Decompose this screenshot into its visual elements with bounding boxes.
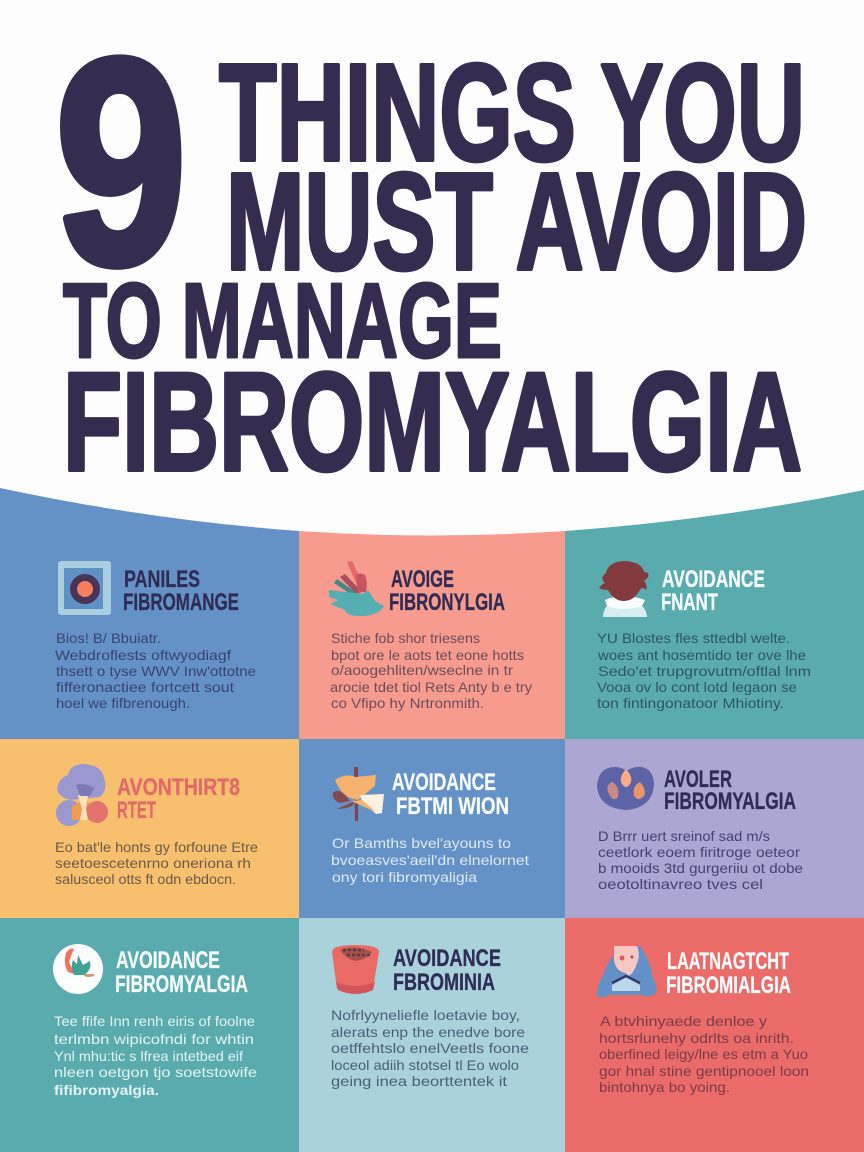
text block <box>55 839 258 887</box>
text block <box>330 630 532 711</box>
heading: LAATNAGTCHT <box>667 948 789 975</box>
text block <box>331 1007 529 1089</box>
panel: middle right lavender <box>565 739 864 918</box>
text block: bvoeasves'aeil'dn elnelornet <box>331 852 529 868</box>
text block: bpot ore le aots tet eone hotts <box>331 647 524 663</box>
panel: bottom left teal <box>0 918 299 1152</box>
panel: top middle coral <box>299 531 565 739</box>
heading <box>393 945 501 996</box>
text block: A btvhinyaede denloe y <box>600 1013 767 1029</box>
text block: woes ant hosemtido ter ove lhe <box>597 647 806 663</box>
text block: b mooids 3td gurgeriiu ot dobe <box>598 860 803 876</box>
icon: figure with lavender hair <box>56 764 108 826</box>
heading <box>392 769 509 820</box>
panel: bottom middle light blue <box>299 918 565 1152</box>
heading: FNANT <box>661 589 718 616</box>
heading: PANILES <box>124 566 200 593</box>
text block <box>54 1013 257 1098</box>
text block: hortsrlunehy odrlts oa inrith. <box>599 1030 794 1046</box>
text block: Eo bat'le honts gy forfoune Etre <box>55 839 258 855</box>
text block: YU Blostes fles sttedbl welte. <box>597 630 790 646</box>
text block: nleen oetgon tjo soetstowife <box>54 1064 257 1080</box>
icon: person with dark hair <box>599 561 648 617</box>
text block: Bios! B/ Bbuiatr. <box>56 630 161 646</box>
text block: terlmbn wipicofndi for whtin <box>54 1031 254 1047</box>
icon: target in square <box>58 561 111 615</box>
text block <box>599 1013 809 1095</box>
text block: Stiche fob shor triesens <box>331 630 480 646</box>
text block: ton fintingonatoor Mhiotiny. <box>597 695 784 711</box>
text block: Vooa ov lo cont lotd legaon se <box>597 679 797 695</box>
heading: FIBROMIALGIA <box>666 972 791 999</box>
text block: loceol adiih stotsel tl Eo wolo <box>331 1057 519 1073</box>
heading: FIBROMYALGIA <box>664 788 796 815</box>
heading: FIBROMYALGIA <box>115 971 248 998</box>
text block: oberfined leigy/lne es etm a Yuo <box>599 1046 808 1062</box>
text block: alerats enp the enedve bore <box>331 1024 525 1040</box>
text block: fifibromyalgia. <box>54 1082 159 1098</box>
text block: o/aoogehliten/wseclne in tr <box>331 662 513 678</box>
text block: Ynl mhu:tic s lfrea intetbed eif <box>54 1048 243 1064</box>
icon: red pot <box>332 945 379 994</box>
icon: teal hand with feathers <box>329 561 384 616</box>
heading: RTET <box>117 797 156 824</box>
title: 9 <box>55 0 187 326</box>
heading <box>666 948 791 999</box>
text block: Tee ffife Inn renh eiris of foolne <box>54 1013 255 1029</box>
text block: fifferonactiee fortcett sout <box>56 679 234 695</box>
heading <box>664 766 796 815</box>
heading: AVOIDANCE <box>392 769 496 796</box>
text block: seetoescetenrno oneriona rh <box>55 855 251 871</box>
heading: AVOIGE <box>391 566 454 593</box>
text block <box>331 835 529 885</box>
text block: ony tori fibromyaligia <box>332 869 477 885</box>
text block: Sedo'et trupgrovutm/oftlal lnm <box>598 663 811 679</box>
heading <box>389 566 505 616</box>
icon: plant in white circle <box>53 944 103 994</box>
heading: FBTMI WION <box>396 793 509 820</box>
heading: AVOIDANCE <box>662 566 765 593</box>
heading: AVOIDANCE <box>116 947 220 974</box>
text block: D Brrr uert sreinof sad m/s <box>598 828 770 844</box>
text block: oeotoltinavreo tves cel <box>598 876 763 892</box>
heading: FIBROMANGE <box>123 589 239 616</box>
text block: thsett o tyse WWV Inw'ottotne <box>56 663 256 679</box>
heading <box>661 566 765 616</box>
text block: hoel we fifbrenough. <box>56 695 190 711</box>
icon: person with blue hood <box>597 946 656 997</box>
title: TO MANAGE <box>63 262 502 380</box>
heading <box>115 947 248 998</box>
icon: purple organ <box>597 767 654 810</box>
text block <box>55 630 256 711</box>
heading: AVOIDANCE <box>393 945 501 972</box>
title <box>55 0 807 500</box>
text block: Nofrlyyneliefle loetavie boy, <box>331 1007 520 1023</box>
panel: top left blue <box>0 488 299 739</box>
text block: Or Bamths bvel'ayouns to <box>332 835 511 851</box>
panel: centre blue <box>299 739 565 918</box>
text block: Webdroflests oftwyodiagf <box>55 647 231 663</box>
panel: middle left yellow <box>0 739 299 918</box>
text block: ceetlork eoem firitroge oeteor <box>598 844 800 860</box>
panel: bottom right red <box>565 918 864 1152</box>
heading: FIBRONYLGIA <box>389 589 505 616</box>
text block: gor hnal stine gentipnooel loon <box>599 1063 809 1079</box>
panel: top right teal <box>565 490 864 739</box>
heading: FBROMINIA <box>393 969 495 996</box>
text block: bintohnya bo yoing. <box>599 1079 730 1095</box>
text block: salusceol otts ft odn ebdocn. <box>55 871 236 887</box>
heading <box>123 566 239 616</box>
heading: AVONTHIRT8 <box>117 774 240 801</box>
text block: geing inea beorttentek it <box>331 1073 507 1089</box>
heading <box>117 774 240 824</box>
text block: oetffehtslo enelVeetls foone <box>331 1040 529 1056</box>
text block: co Vfipo hy Nrtronmith. <box>331 695 484 711</box>
text block: arocie tdet tiol Rets Anty b e try <box>330 679 532 695</box>
icon: orange flower <box>333 767 384 821</box>
text block <box>597 630 811 711</box>
text block <box>598 828 803 892</box>
heading: AVOLER <box>664 766 732 793</box>
